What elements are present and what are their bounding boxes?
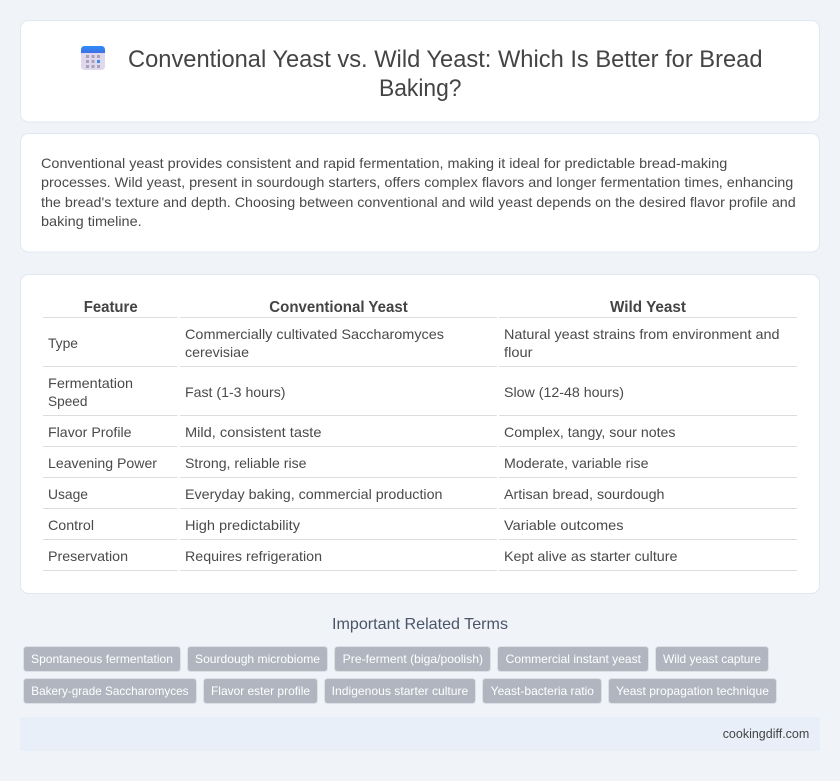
tag: Wild yeast capture <box>663 652 761 666</box>
row: fermentation speed: Fast (1-3 hours) <box>185 384 286 400</box>
icon: calendar <box>81 46 105 70</box>
tag <box>482 678 602 704</box>
row: type: flour <box>504 344 533 360</box>
tag <box>656 646 768 672</box>
row: fermentation speed: Speed <box>48 393 88 409</box>
row: control: Control <box>48 517 94 533</box>
tag: Yeast propagation technique <box>616 684 769 698</box>
row: type: cerevisiae <box>185 344 249 360</box>
text block: introduction: the bread's texture and depth. Choosing between conventional and wild yeast depends on the desired flavor profile and <box>41 194 796 210</box>
tag: Bakery-grade Saccharomyces <box>31 684 188 698</box>
text block: introduction: baking timeline. <box>41 213 142 229</box>
tag <box>608 678 776 704</box>
title <box>128 46 762 102</box>
row: type: Type <box>48 335 78 351</box>
tag: Pre-ferment (biga/poolish) <box>343 652 483 666</box>
row: leavening power: Moderate, variable rise <box>504 455 649 471</box>
footer <box>20 717 820 751</box>
text block: introduction <box>41 155 796 229</box>
tag <box>24 678 196 704</box>
tag: Sourdough microbiome <box>195 652 320 666</box>
row: fermentation speed: Fermentation <box>48 375 133 391</box>
tag: Flavor ester profile <box>211 684 310 698</box>
title: Baking? <box>379 75 462 102</box>
row: type <box>48 326 780 360</box>
row: flavor profile <box>48 424 676 440</box>
tag <box>324 678 476 704</box>
row: control: High predictability <box>185 517 300 533</box>
tag: Yeast-bacteria ratio <box>491 684 594 698</box>
row: leavening power: Strong, reliable rise <box>185 455 307 471</box>
row: flavor profile: Complex, tangy, sour notes <box>504 424 676 440</box>
table header <box>84 299 686 316</box>
row: flavor profile: Mild, consistent taste <box>185 424 322 440</box>
row: fermentation speed: Slow (12-48 hours) <box>504 384 624 400</box>
tag <box>204 678 318 704</box>
row: type: Commercially cultivated Saccharomyces <box>185 326 444 342</box>
panel: comparison table <box>20 274 820 594</box>
tag: Spontaneous fermentation <box>31 652 173 666</box>
title: Conventional Yeast vs. Wild Yeast: Which Is Better for Bread <box>128 46 762 73</box>
tag <box>24 646 180 672</box>
row: usage: Everyday baking, commercial production <box>185 486 442 502</box>
tag: Commercial instant yeast <box>506 652 642 666</box>
row: flavor profile: Flavor Profile <box>48 424 132 440</box>
row: type: Natural yeast strains from environment and <box>504 326 780 342</box>
footer: cookingdiff.com <box>723 727 809 741</box>
tag <box>334 646 490 672</box>
row: preservation: Kept alive as starter culture <box>504 548 678 564</box>
table header: Conventional Yeast <box>269 299 408 316</box>
table header: Wild Yeast <box>610 299 686 316</box>
table header: Feature <box>84 299 138 316</box>
row: control: Variable outcomes <box>504 517 624 533</box>
text block: introduction: Conventional yeast provides consistent and rapid fermentation, making it ideal for predictable bread-making <box>41 155 727 171</box>
row: preservation <box>48 548 678 564</box>
tag <box>498 646 648 672</box>
row: leavening power <box>48 455 649 471</box>
row: usage <box>48 486 664 502</box>
row: preservation: Preservation <box>48 548 128 564</box>
panel: introduction <box>20 134 820 252</box>
row: control <box>48 517 624 533</box>
panel: header <box>20 20 820 122</box>
heading: important related terms: Important Related Terms <box>332 616 508 633</box>
row: leavening power: Leavening Power <box>48 455 157 471</box>
row: preservation: Requires refrigeration <box>185 548 322 564</box>
row: usage: Usage <box>48 486 88 502</box>
tag: Indigenous starter culture <box>332 684 469 698</box>
text block: introduction: processes. Wild yeast, present in sourdough starters, offers complex flavors and longer fermentation times, enhancing <box>41 174 793 190</box>
row: fermentation speed <box>48 375 624 409</box>
tag <box>188 646 328 672</box>
tags: related terms <box>24 646 776 704</box>
row: usage: Artisan bread, sourdough <box>504 486 664 502</box>
